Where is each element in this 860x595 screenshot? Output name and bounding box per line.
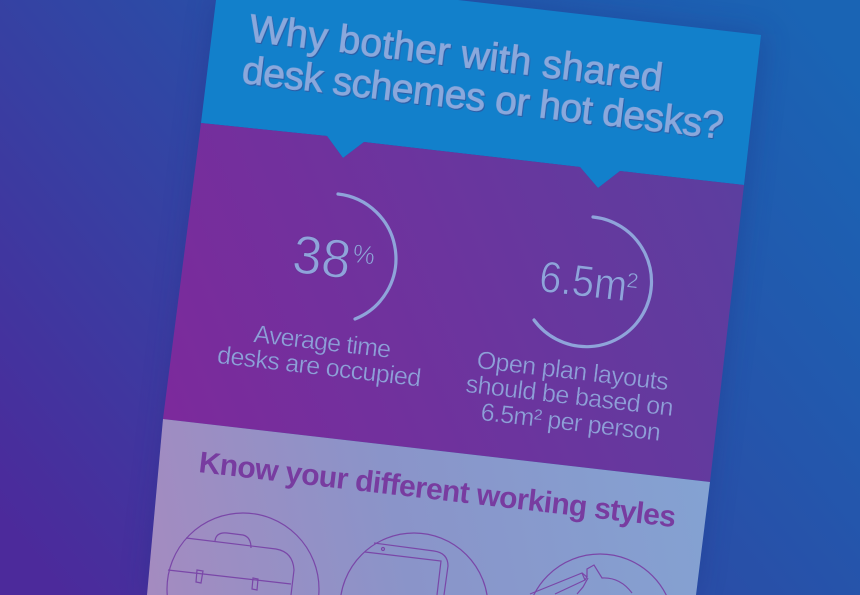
stat: 38 percent — [216, 194, 423, 393]
stat: 6.5 square metres — [464, 217, 675, 447]
panel: working styles — [147, 419, 710, 595]
value: 38 percent: 38 — [290, 224, 354, 291]
icon: tablet — [340, 533, 488, 595]
gauge arc: 6.5 square metres — [534, 217, 651, 347]
value: 6.5 square metres: 6.5m — [537, 252, 630, 311]
panel: statistics — [163, 123, 744, 482]
value: 38 percent: % — [351, 238, 377, 270]
caption: open plan layouts — [464, 346, 675, 447]
caption: open plan layouts: should be based on — [464, 370, 675, 422]
card shadow — [145, 0, 765, 595]
gauge arc: 38 percent — [338, 194, 396, 319]
title: Why bother with shared — [247, 7, 665, 100]
icon: desk lamp — [526, 554, 674, 595]
icon: briefcase — [167, 513, 319, 595]
caption: open plan layouts: 6.5m² per person — [479, 398, 662, 447]
title: desk schemes or hot desks? — [240, 49, 726, 148]
caption: average time: desks are occupied — [216, 341, 423, 393]
caption: average time: Average time — [252, 320, 393, 364]
panel: header — [201, 0, 761, 188]
value: 6.5 square metres: 2 — [625, 269, 640, 293]
heading: working styles: Know your different working styles — [197, 446, 678, 534]
caption: open plan layouts: Open plan layouts — [475, 346, 670, 396]
